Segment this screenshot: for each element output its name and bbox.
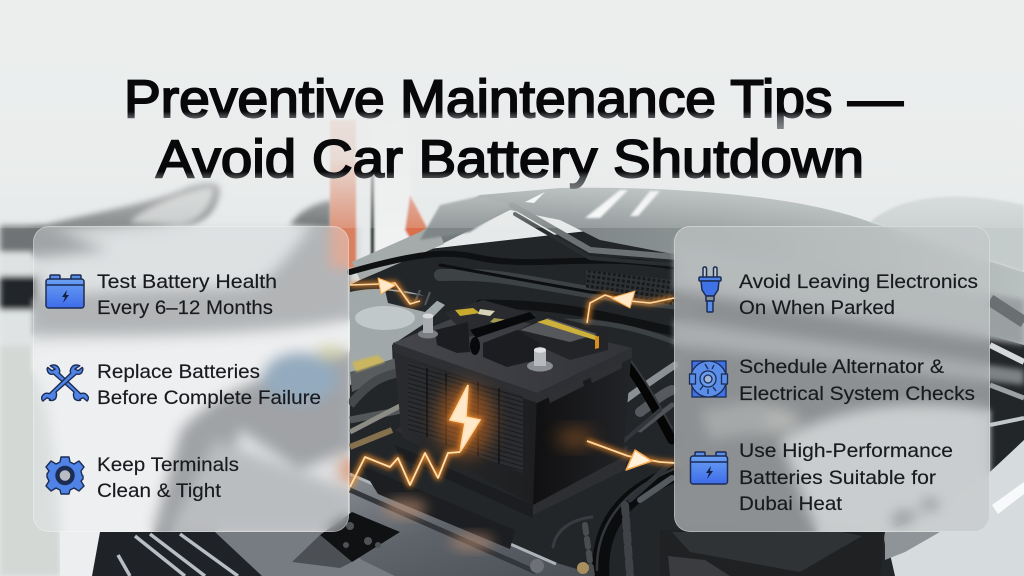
text: keep terminals bbox=[97, 454, 239, 502]
blurred headlight bbox=[20, 182, 332, 232]
text: avoid leaving electronics: On When Parked bbox=[739, 297, 895, 319]
battery base tray bbox=[395, 425, 628, 515]
text: replace batteries: Before Complete Failure bbox=[97, 387, 321, 409]
orange stands behind hood bbox=[330, 120, 428, 272]
icon: plug bbox=[699, 267, 721, 312]
text: avoid leaving electronics: Avoid Leaving Electronics bbox=[739, 271, 978, 293]
text: keep terminals: Keep Terminals bbox=[97, 454, 239, 476]
text: keep terminals: Clean & Tight bbox=[97, 480, 222, 502]
text: replace batteries bbox=[97, 361, 321, 409]
spark arrow: bottom right bbox=[557, 430, 675, 470]
spark arrow: top left bbox=[350, 278, 420, 304]
title: Preventive Maintenance Tips — bbox=[124, 70, 903, 129]
spark zigzag: bottom left bbox=[350, 452, 460, 487]
battery lid blocks bbox=[445, 300, 537, 337]
top fade overlay bbox=[0, 0, 1024, 228]
strut tower left bbox=[350, 289, 445, 385]
right edge trim stripes bbox=[990, 300, 1024, 425]
battery terminals bbox=[418, 330, 438, 338]
battery right face bbox=[533, 348, 632, 505]
text: schedule alternator: Schedule Alternator & bbox=[739, 356, 944, 378]
blurred car and floor at left bbox=[0, 225, 360, 576]
battery top face bbox=[393, 310, 632, 393]
dark recess with bolts bbox=[292, 512, 400, 568]
text: replace batteries: Replace Batteries bbox=[97, 361, 260, 383]
text: schedule alternator bbox=[739, 356, 975, 405]
text: test battery health: Test Battery Health bbox=[97, 271, 277, 293]
battery left face bbox=[393, 343, 537, 505]
text: use high-performance bbox=[739, 440, 953, 515]
lightning bolt on battery bbox=[437, 384, 493, 456]
grille and lower left trim bbox=[92, 532, 330, 576]
white fender at right bbox=[885, 440, 1024, 576]
cowl bars bbox=[350, 205, 690, 348]
spark arrow: top right bbox=[587, 291, 674, 323]
air filter box bbox=[660, 530, 885, 576]
title: Avoid Car Battery Shutdown bbox=[156, 130, 864, 189]
text: schedule alternator: Electrical System Checks bbox=[739, 383, 975, 405]
panel: left tips bbox=[33, 226, 349, 532]
icon: crossed wrenches bbox=[42, 365, 88, 401]
cowl mesh vent bbox=[586, 270, 672, 305]
engine bay dark base bbox=[350, 225, 1024, 576]
wiring right of battery bbox=[618, 350, 675, 500]
lower right engine parts bbox=[553, 469, 674, 576]
icon: alternator bbox=[690, 361, 728, 397]
car battery bbox=[393, 300, 632, 518]
text: avoid leaving electronics bbox=[739, 271, 978, 319]
text: test battery health: Every 6–12 Months bbox=[97, 297, 273, 319]
icon: gear bbox=[46, 457, 84, 494]
louver panel bbox=[408, 362, 523, 473]
panel: right tips bbox=[674, 226, 990, 532]
text: use high-performance: Dubai Heat bbox=[739, 493, 843, 515]
hood underside and cowl bbox=[418, 188, 1024, 345]
bumper slam panel bbox=[300, 473, 600, 576]
icon: battery bbox=[46, 275, 84, 308]
mid-gray engine behind right panel bbox=[674, 240, 1024, 540]
icon: battery bbox=[690, 452, 728, 484]
text: use high-performance: Use High-Performance bbox=[739, 440, 953, 462]
text: use high-performance: Batteries Suitable for bbox=[739, 467, 937, 489]
text: test battery health bbox=[97, 271, 277, 319]
battery right ledges bbox=[548, 361, 622, 403]
